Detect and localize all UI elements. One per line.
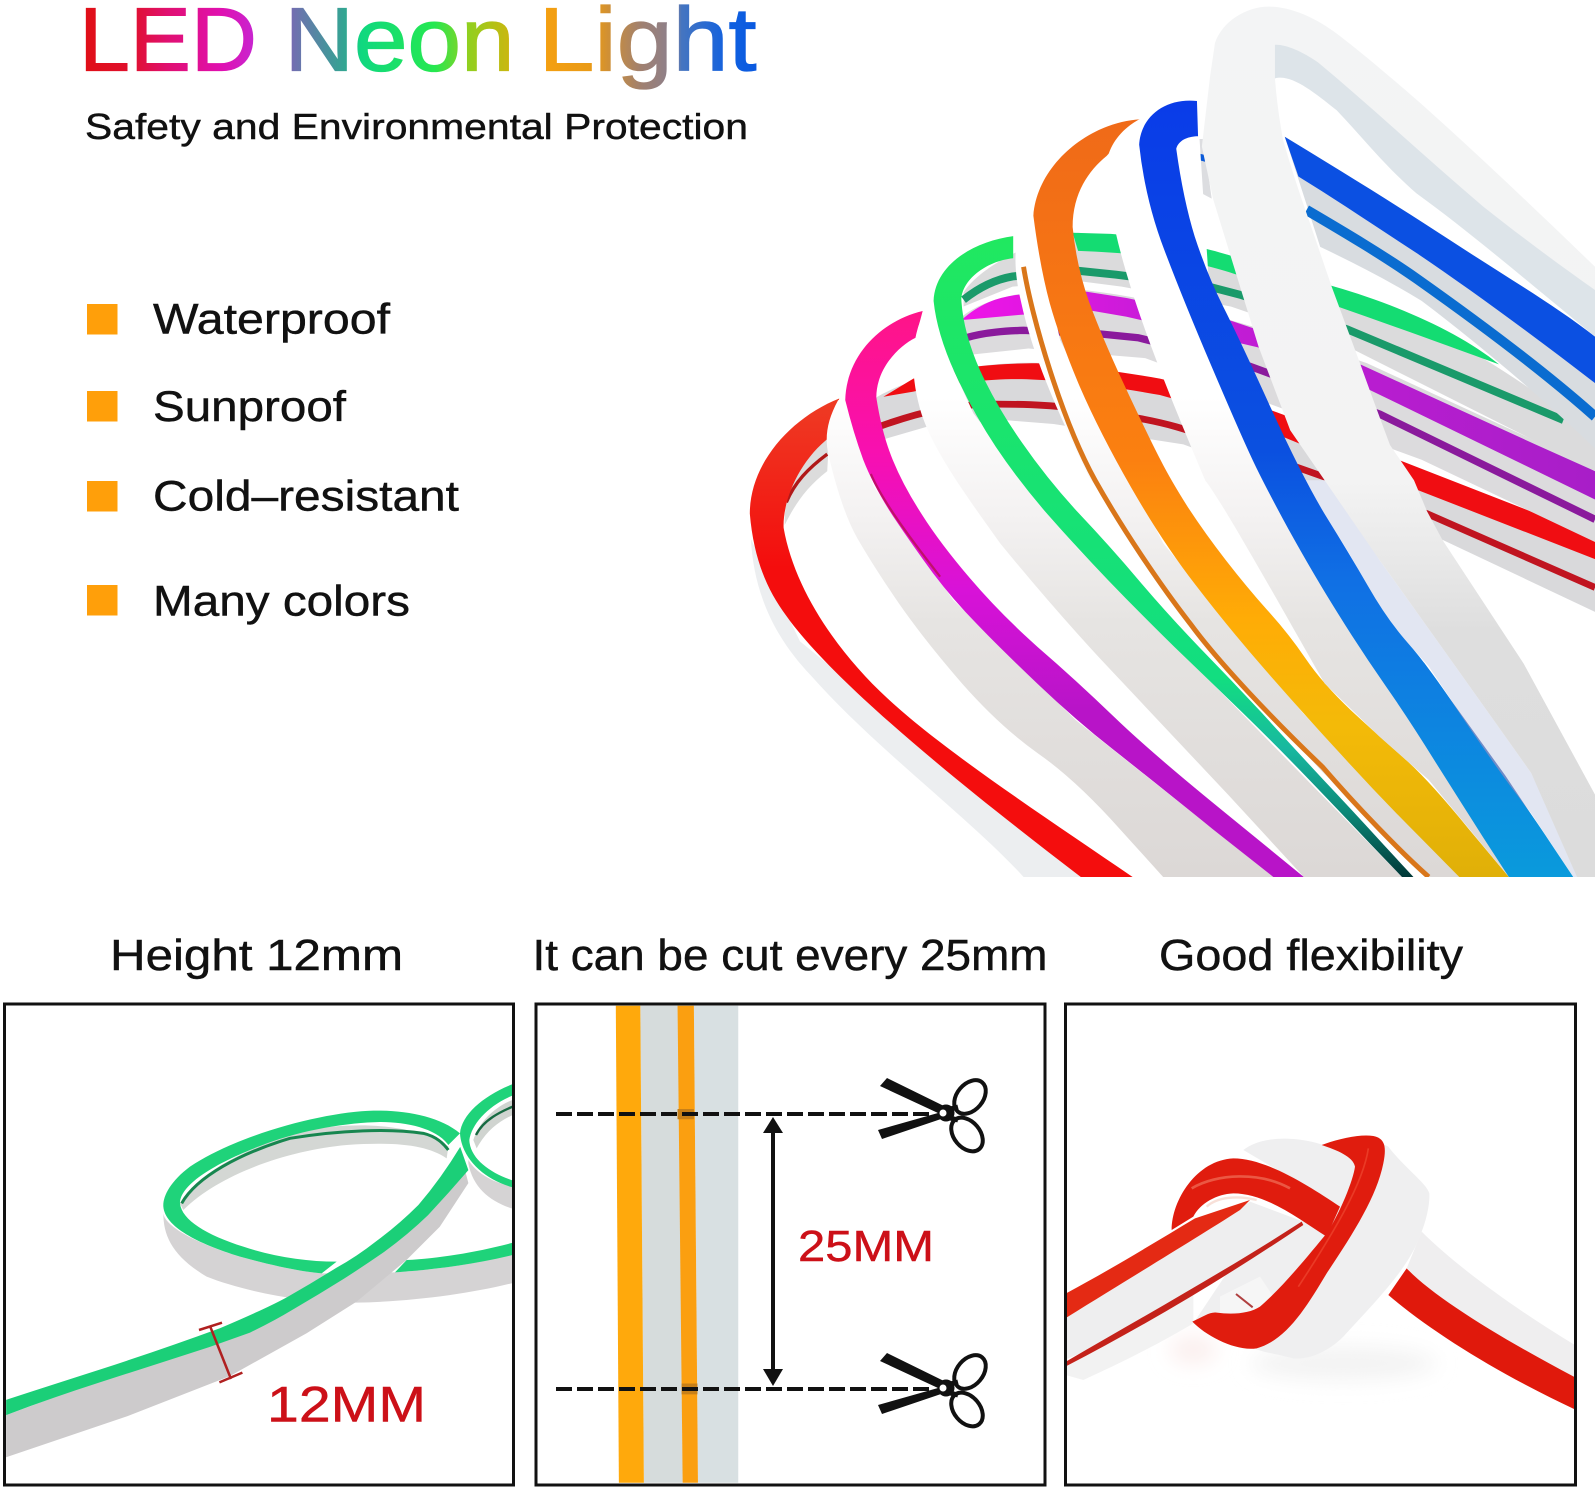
dimension marker (199, 1323, 242, 1382)
panel: cut every 25mm (536, 1004, 1045, 1485)
bullet: sunproof (87, 391, 118, 422)
strip loop: magenta (827, 311, 1304, 877)
panel: height 12mm (4, 1004, 517, 1485)
feature: cold-resistant: Cold–resistant (153, 472, 459, 520)
panel: good flexibility (1060, 1004, 1583, 1485)
far band: blue (1177, 137, 1595, 448)
green neon tape photo (6, 1083, 517, 1457)
bullet: cold-resistant (87, 481, 118, 512)
strip loop: orange (1015, 119, 1509, 877)
feature: many colors: Many colors (153, 578, 410, 626)
feature: sunproof: Sunproof (153, 383, 347, 431)
heading: cut spacing: It can be cut every 25mm (532, 931, 1048, 980)
amber neon tape photo (616, 1006, 738, 1483)
strip loop: blue (1106, 99, 1580, 877)
far band: red (876, 363, 1595, 612)
subtitle: Safety and Environmental Protection (85, 106, 748, 147)
icon: scissors top (878, 1074, 992, 1157)
far band: purple (961, 290, 1595, 542)
feature: waterproof: Waterproof (153, 296, 391, 344)
strip loop: red (750, 398, 1133, 877)
dimension label: 25MM: 25MM (798, 1222, 934, 1271)
heading: height: Height 12mm (110, 931, 403, 980)
bullet: waterproof (87, 304, 118, 334)
double arrow 25mm (763, 1117, 783, 1386)
dimension label: 12MM: 12MM (267, 1376, 426, 1432)
title (79, 0, 756, 90)
strip loop: white (1202, 7, 1595, 877)
hero photo: coloured neon strips (750, 7, 1595, 877)
icon: scissors bottom (878, 1349, 992, 1432)
panel frame (1066, 1004, 1576, 1485)
feature list (87, 296, 459, 626)
bullet: many colors (87, 585, 118, 616)
panel frame (4, 1004, 514, 1485)
cut guide line: top (556, 1112, 930, 1116)
strip loop: green (913, 236, 1413, 877)
heading: flexibility: Good flexibility (1159, 931, 1463, 980)
far band: green (964, 233, 1595, 471)
red knot photo (1060, 1136, 1583, 1413)
panel frame (536, 1004, 1045, 1485)
cut guide line: bottom (556, 1387, 930, 1391)
